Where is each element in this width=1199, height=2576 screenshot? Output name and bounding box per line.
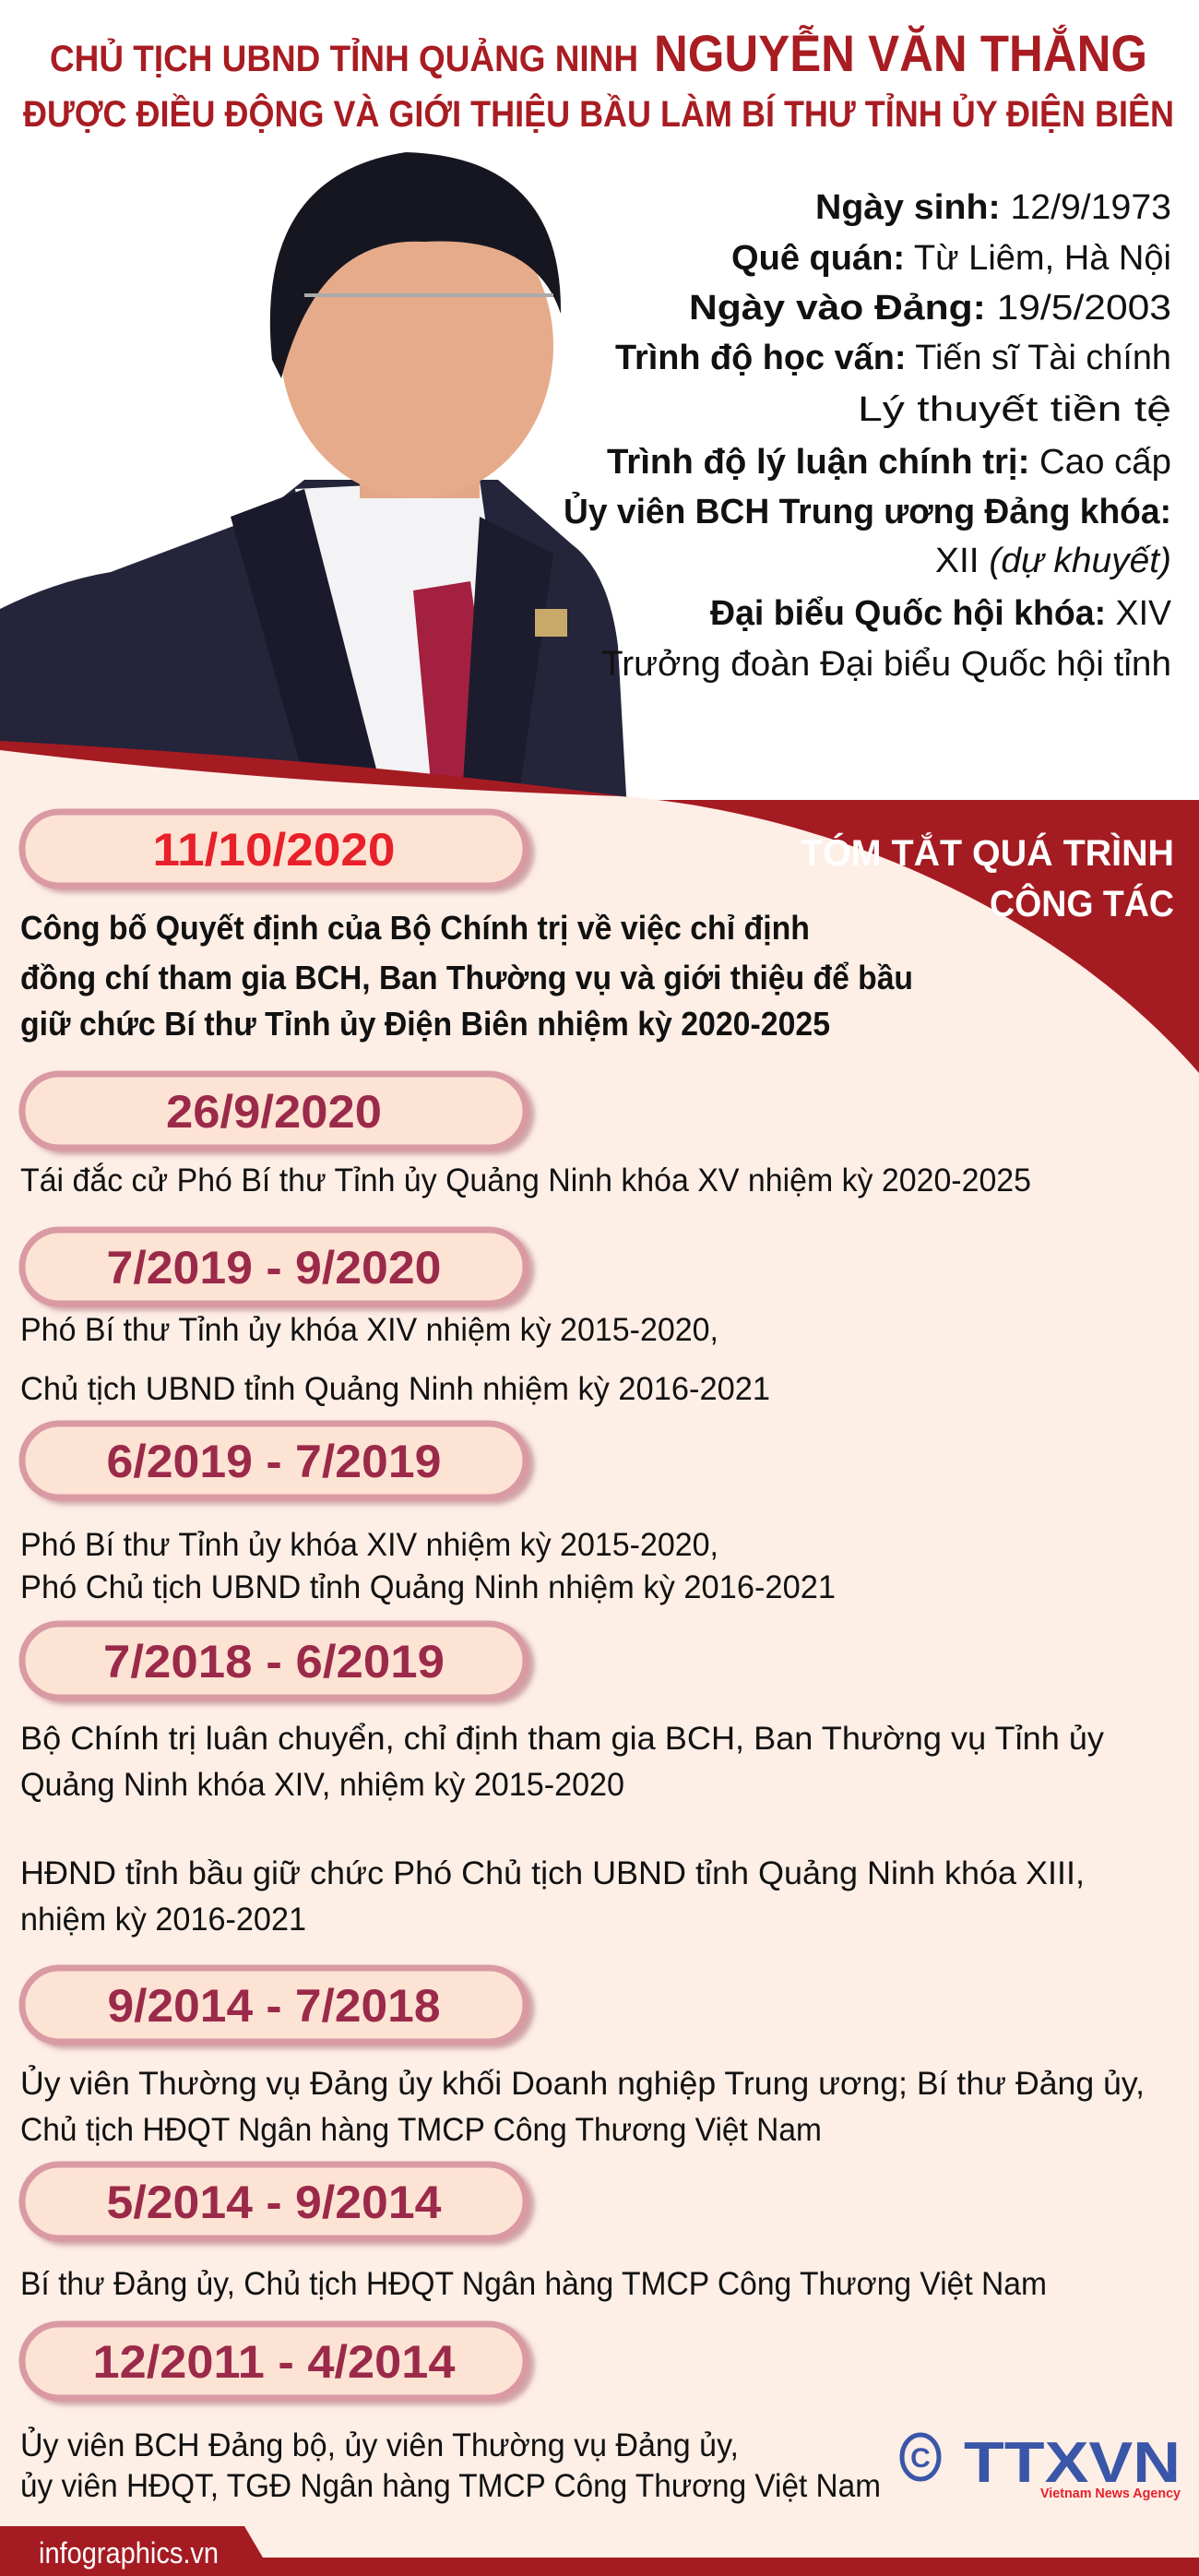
timeline item 2: 26/9/2020 — [166, 1086, 382, 1138]
timeline item 1 — [20, 812, 913, 1043]
logo: TTXVN — [902, 2431, 1181, 2501]
personal info: Trưởng đoàn Đại biểu Quốc hội tỉnh — [601, 645, 1171, 684]
footer bar: infographics.vn — [39, 2536, 219, 2570]
logo: TTXVN: TTXVN — [964, 2431, 1181, 2495]
red band background — [0, 741, 1199, 1073]
timeline item 1: Công bố Quyết định của Bộ Chính trị về việc chỉ định — [20, 909, 810, 947]
timeline item 7: Bí thư Đảng ủy, Chủ tịch HĐQT Ngân hàng TMCP Công Thương Việt Nam — [20, 2266, 1047, 2302]
timeline item 3 — [20, 1230, 770, 1407]
logo: TTXVN: Vietnam News Agency — [1040, 2486, 1181, 2501]
timeline item 5: Quảng Ninh khóa XIV, nhiệm kỳ 2015-2020 — [20, 1767, 624, 1803]
timeline item 5: Bộ Chính trị luân chuyển, chỉ định tham gia BCH, Ban Thường vụ Tỉnh ủy — [20, 1721, 1105, 1757]
personal info: Đại biểu Quốc hội khóa: XIV — [710, 594, 1172, 633]
timeline item 8 — [20, 2324, 881, 2504]
timeline item 4: 6/2019 - 7/2019 — [107, 1436, 442, 1487]
timeline item 4 — [20, 1424, 836, 1605]
title: CHỦ TỊCH UBND TỈNH QUẢNG NINH — [50, 37, 638, 79]
timeline item 6: Ủy viên Thường vụ Đảng ủy khối Doanh nghiệp Trung ương; Bí thư Đảng ủy, — [20, 2065, 1145, 2102]
timeline item 5: nhiệm kỳ 2016-2021 — [20, 1902, 306, 1938]
section heading: CÔNG TÁC — [990, 882, 1174, 924]
personal info: Trình độ học vấn: Tiến sĩ Tài chính — [615, 339, 1171, 377]
timeline item 6 — [20, 1968, 1145, 2148]
timeline item 2: Tái đắc cử Phó Bí thư Tỉnh ủy Quảng Ninh khóa XV nhiệm kỳ 2020-2025 — [20, 1163, 1031, 1199]
section heading: TÓM TẮT QUÁ TRÌNH — [801, 831, 1174, 874]
timeline item 3: 7/2019 - 9/2020 — [107, 1242, 442, 1294]
timeline item 2 — [20, 1074, 1031, 1199]
title — [23, 24, 1174, 135]
timeline item 1: đồng chí tham gia BCH, Ban Thường vụ và giới thiệu để bầu — [20, 959, 913, 996]
timeline item 4: Phó Chủ tịch UBND tỉnh Quảng Ninh nhiệm kỳ 2016-2021 — [20, 1569, 836, 1605]
personal info: Lý thuyết tiền tệ — [858, 390, 1171, 429]
timeline item 5 — [20, 1624, 1105, 1938]
timeline item 7: 5/2014 - 9/2014 — [107, 2176, 442, 2228]
timeline item 8: Ủy viên BCH Đảng bộ, ủy viên Thường vụ Đảng ủy, — [20, 2427, 739, 2463]
timeline item 6: 9/2014 - 7/2018 — [107, 1980, 441, 2032]
timeline item 1: giữ chức Bí thư Tỉnh ủy Điện Biên nhiệm kỳ 2020-2025 — [20, 1005, 830, 1043]
timeline item 7 — [20, 2165, 1047, 2302]
personal info — [564, 188, 1172, 684]
title: NGUYỄN VĂN THẮNG — [654, 24, 1147, 82]
portrait photo — [0, 152, 627, 812]
timeline item 1: 11/10/2020 — [153, 824, 395, 876]
timeline item 3: Phó Bí thư Tỉnh ủy khóa XIV nhiệm kỳ 2015-2020, — [20, 1312, 718, 1348]
personal info: Ngày vào Đảng: 19/5/2003 — [689, 289, 1171, 328]
personal info: Quê quán: Từ Liêm, Hà Nội — [731, 239, 1171, 278]
logo: TTXVN: C — [910, 2443, 931, 2474]
timeline item 3: Chủ tịch UBND tỉnh Quảng Ninh nhiệm kỳ 2016-2021 — [20, 1371, 770, 1407]
section heading — [801, 831, 1174, 924]
personal info: Ngày sinh: 12/9/1973 — [815, 188, 1171, 227]
timeline item 6: Chủ tịch HĐQT Ngân hàng TMCP Công Thương Việt Nam — [20, 2112, 822, 2148]
timeline item 8: ủy viên HĐQT, TGĐ Ngân hàng TMCP Công Thương Việt Nam — [20, 2468, 881, 2504]
timeline item 5: 7/2018 - 6/2019 — [103, 1636, 445, 1688]
timeline item 4: Phó Bí thư Tỉnh ủy khóa XIV nhiệm kỳ 2015-2020, — [20, 1527, 718, 1563]
personal info: Trình độ lý luận chính trị: Cao cấp — [607, 443, 1171, 482]
beige content background — [0, 750, 1199, 2576]
personal info: Ủy viên BCH Trung ương Đảng khóa: — [564, 491, 1171, 531]
personal info: XII (dự khuyết) — [935, 542, 1171, 580]
timeline item 5: HĐND tỉnh bầu giữ chức Phó Chủ tịch UBND tỉnh Quảng Ninh khóa XIII, — [20, 1855, 1085, 1891]
timeline item 8: 12/2011 - 4/2014 — [92, 2336, 456, 2388]
footer bar — [0, 2526, 1199, 2576]
